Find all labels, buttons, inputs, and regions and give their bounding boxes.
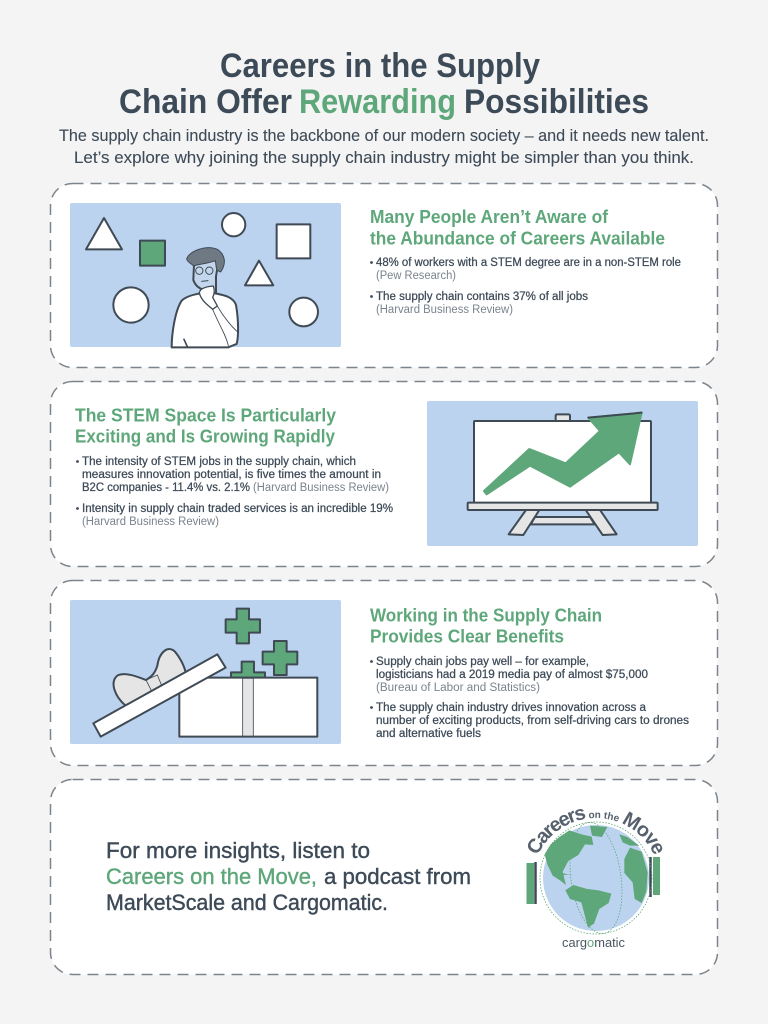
heading: the Abundance of Careers Available [370,228,665,248]
bullet: STEM degree: 48% of workers with a STEM degree are in a non-STEM role [376,257,681,269]
title: Chain Offer [119,83,292,121]
bullet: share of jobs [370,291,588,316]
panel: benefits [50,580,718,766]
panel: STEM growth [50,382,718,566]
heading: Exciting and Is Growing Rapidly [75,426,336,446]
bullet: traded services: Intensity in supply chain traded services is an incredible 19% [82,503,393,515]
title: Rewarding [299,83,456,121]
bullet: STEM intensity [76,456,389,494]
logo: Careers on the Move globe: cargomatic [562,935,625,950]
podcast text: a podcast from [324,864,471,889]
bullet: STEM intensity: B2C companies - 11.4% vs. 2.1% [82,482,250,494]
illustration: thinking person among shapes [70,203,341,347]
bullet: pay: logisticians had a 2019 media pay of almost $75,000 [376,669,648,681]
heading: Many People Aren’t Aware of [370,206,609,227]
illustration: presentation board with rising arrow [427,401,698,546]
logo: Careers on the Move globe: on the [589,812,619,822]
podcast text [106,838,471,915]
intro text [59,127,709,167]
panel: awareness of careers [50,184,718,368]
bullet: STEM degree [370,257,681,282]
bullet: innovation: The supply chain industry drives innovation across a [376,702,647,714]
podcast text: For more insights, listen to [106,838,370,863]
bullet: innovation: and alternative fuels [376,728,481,740]
title: Careers in the Supply [220,47,540,85]
intro text: The supply chain industry is the backbone of our modern society – and it needs new talent. [59,127,709,145]
title: Possibilities [464,83,649,121]
logo: Careers on the Move globe [526,809,662,950]
heading [75,404,337,446]
bullet: innovation: number of exciting products, from self-driving cars to drones [376,715,689,727]
bullet: innovation [370,702,689,740]
bullet: traded services [76,503,393,528]
heading [370,604,602,646]
bullet: STEM degree: (Pew Research) [376,270,456,282]
heading: Working in the Supply Chain [370,604,602,626]
bullet: share of jobs: (Harvard Business Review) [376,304,513,316]
bullet: pay [370,656,648,694]
heading: The STEM Space Is Particularly [75,404,337,426]
bullet: STEM intensity: The intensity of STEM jobs in the supply chain, which [82,456,356,468]
heading: Provides Clear Benefits [370,626,564,646]
logo: Careers on the Move globe: Careers [528,809,586,853]
bullet: share of jobs: The supply chain contains 37% of all jobs [376,291,588,303]
bullet: STEM intensity: (Harvard Business Review) [253,482,389,494]
bullet: pay: (Bureau of Labor and Statistics) [376,682,540,694]
bullet: traded services: (Harvard Business Review) [82,516,219,528]
podcast text: Careers on the Move, [106,864,317,889]
illustration: open gift box [70,600,341,744]
logo: Careers on the Move globe: Move [622,812,662,854]
podcast text: MarketScale and Cargomatic. [106,890,388,915]
panel: podcast call to action [50,778,718,976]
title [119,47,649,121]
heading [370,206,665,248]
bullet: STEM intensity: measures innovation potential, is five times the amount in [82,469,381,481]
bullet: pay: Supply chain jobs pay well – for example, [376,656,589,668]
intro text: Let’s explore why joining the supply chain industry might be simpler than you think. [74,149,694,167]
